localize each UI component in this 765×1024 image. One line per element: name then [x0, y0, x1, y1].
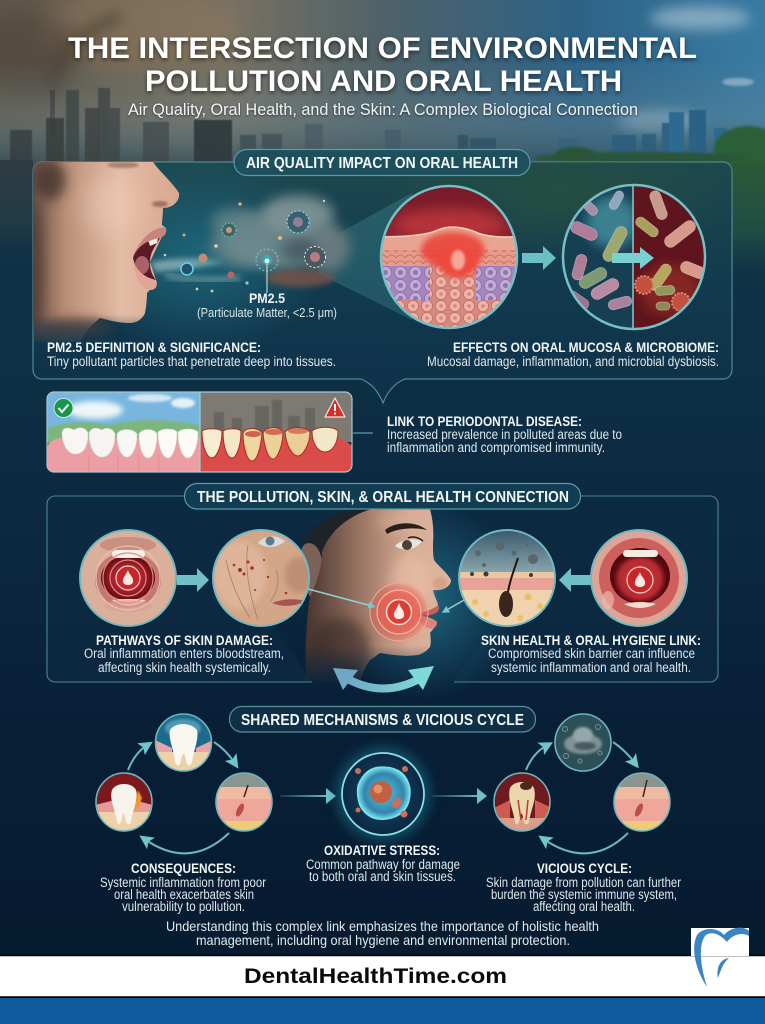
- text: vicious cycle: VICIOUS CYCLE:: [537, 860, 632, 876]
- text: consequences: oral health exacerbates skin: [114, 887, 254, 902]
- section heading pill: shared mechanisms: [230, 706, 536, 732]
- text: pathways of skin damage: affecting skin health systemically.: [98, 660, 271, 675]
- text: vicious cycle: burden the systemic immune system,: [491, 887, 677, 902]
- text: skin health and oral hygiene link: systemic inflammation and oral health.: [491, 660, 691, 675]
- icon: cell under oxidative stress: [336, 747, 430, 841]
- text: skin health and oral hygiene link: SKIN HEALTH & ORAL HYGIENE LINK:: [481, 632, 701, 648]
- section heading pill: air quality: [234, 150, 530, 176]
- arrow: mucosa to microbiome: [522, 246, 556, 270]
- text: effects on mucosa and microbiome: EFFECTS ON ORAL MUCOSA & MICROBIOME:: [453, 339, 719, 355]
- arrow: [177, 568, 209, 592]
- connector to periodontal text: [352, 432, 373, 434]
- cycle arrows: [526, 742, 634, 853]
- mouth: [133, 228, 166, 290]
- cycle: consequences: [95, 714, 273, 914]
- footer white band: [0, 956, 765, 997]
- text: consequences: vulnerability to pollution.: [122, 899, 245, 914]
- text: PM2.5 definition: [47, 339, 336, 369]
- icon: damaged skin layers: [614, 773, 672, 832]
- icon: damaged skin layers: [215, 773, 273, 832]
- text: effects on mucosa and microbiome: Mucosal damage, inflammation, and microbial dysbiosis.: [427, 354, 719, 369]
- text: oxidative stress: to both oral and skin tissues.: [309, 869, 456, 884]
- text: consequences: CONSEQUENCES:: [131, 860, 236, 876]
- text: pathways of skin damage: PATHWAYS OF SKIN DAMAGE:: [96, 632, 273, 648]
- cycle arrows: [128, 742, 234, 853]
- section heading pill: connection: THE POLLUTION, SKIN, & ORAL HEALTH CONNECTION: [197, 489, 569, 506]
- illustration: inflamed oral mucosa cross-section: [378, 185, 518, 332]
- illustration: skin barrier and pollution: [458, 530, 556, 628]
- icon: check badge: [54, 398, 73, 418]
- logo: tooth outline: [691, 928, 749, 987]
- arrow: [559, 568, 591, 592]
- illustration: microbiome dysbiosis: [560, 180, 708, 335]
- arrow: skin to cheek: [308, 589, 372, 606]
- central face glow: [330, 500, 520, 700]
- section heading pill: air quality: AIR QUALITY IMPACT ON ORAL HEALTH: [246, 155, 518, 172]
- text: oxidative stress: [306, 842, 460, 884]
- closing statement: management, including oral hygiene and environmental protection.: [196, 932, 570, 948]
- title: POLLUTION AND ORAL HEALTH: [145, 65, 622, 98]
- double-headed curved arrow: [333, 666, 434, 690]
- icon: pollution cloud: [555, 714, 611, 771]
- text: effects on mucosa and microbiome: [427, 339, 719, 369]
- footer blue strip: [0, 998, 765, 1024]
- text: link to periodontal disease: inflammation and compromised immunity.: [387, 440, 605, 455]
- text: PM2.5 definition: PM2.5 DEFINITION & SIGNIFICANCE:: [47, 339, 261, 355]
- icon: warning badge: [325, 398, 345, 417]
- arrow: from oxidative stress: [432, 788, 487, 804]
- panel: pollution, skin and oral health connection: [47, 496, 718, 700]
- PM2.5 label: (Particulate Matter, <2.5 μm): [197, 305, 337, 320]
- text: oxidative stress: Common pathway for damage: [306, 857, 460, 872]
- cycle: vicious cycle: [486, 714, 681, 914]
- text: consequences: [100, 860, 266, 914]
- PM2.5 label: PM2.5: [249, 290, 285, 306]
- closing statement: Understanding this complex link emphasizes the importance of holistic health: [166, 918, 599, 934]
- text: pathways of skin damage: Oral inflammation enters bloodstream,: [84, 646, 284, 661]
- icon: cheek inflammation rings: [368, 581, 430, 643]
- PM2.5 label: [197, 290, 337, 320]
- illustration: oral inflammation mouth (right): [590, 530, 688, 626]
- image: healthy vs diseased teeth: [47, 392, 352, 472]
- closing statement: [166, 918, 599, 948]
- text: consequences: Systemic inflammation from poor: [100, 875, 266, 890]
- illustration: woman face in profile: [301, 510, 451, 680]
- title: THE INTERSECTION OF ENVIRONMENTAL: [68, 32, 697, 65]
- text: skin health and oral hygiene link: [481, 632, 701, 675]
- text: vicious cycle: [486, 860, 681, 914]
- cycle: oxidative stress: [306, 747, 460, 884]
- section heading pill: shared mechanisms: SHARED MECHANISMS & VICIOUS CYCLE: [241, 712, 524, 729]
- subtitle: Air Quality, Oral Health, and the Skin: A Complex Biological Connection: [128, 101, 638, 119]
- text: vicious cycle: Skin damage from pollution can further: [486, 875, 681, 890]
- arrow: follicle to cheek: [445, 600, 464, 611]
- text: link to periodontal disease: Increased prevalence in polluted areas due to: [387, 427, 622, 442]
- illustration: aged damaged skin: [213, 530, 313, 626]
- illustration: magnifier cone: [317, 193, 412, 320]
- text: pathways of skin damage: [84, 632, 284, 675]
- illustration: face profile inhaling: [27, 160, 179, 342]
- text: link to periodontal disease: [387, 413, 622, 455]
- panel: air quality impact on oral health: [32, 161, 733, 404]
- text: skin health and oral hygiene link: Compromised skin barrier can influence: [488, 646, 695, 661]
- text: link to periodontal disease: LINK TO PERIODONTAL DISEASE:: [387, 413, 582, 429]
- icon: inflamed tooth: [95, 773, 153, 832]
- icon: healthy tooth: [155, 714, 213, 772]
- text: vicious cycle: affecting oral health.: [533, 899, 635, 914]
- arrow: to oxidative stress: [280, 788, 336, 804]
- icon: decayed tooth: [494, 773, 552, 832]
- website name: DentalHealthTime.com: [244, 964, 507, 988]
- header scene: polluted city to clean skyline: [0, 0, 765, 293]
- text: oxidative stress: OXIDATIVE STRESS:: [324, 842, 440, 858]
- section heading pill: connection: [184, 484, 580, 509]
- illustration: PM2.5 pollution cloud: [150, 195, 350, 293]
- title: [68, 32, 697, 98]
- illustration: oral inflammation mouth (left): [80, 530, 176, 626]
- text: PM2.5 definition: Tiny pollutant particles that penetrate deep into tissues.: [47, 354, 336, 369]
